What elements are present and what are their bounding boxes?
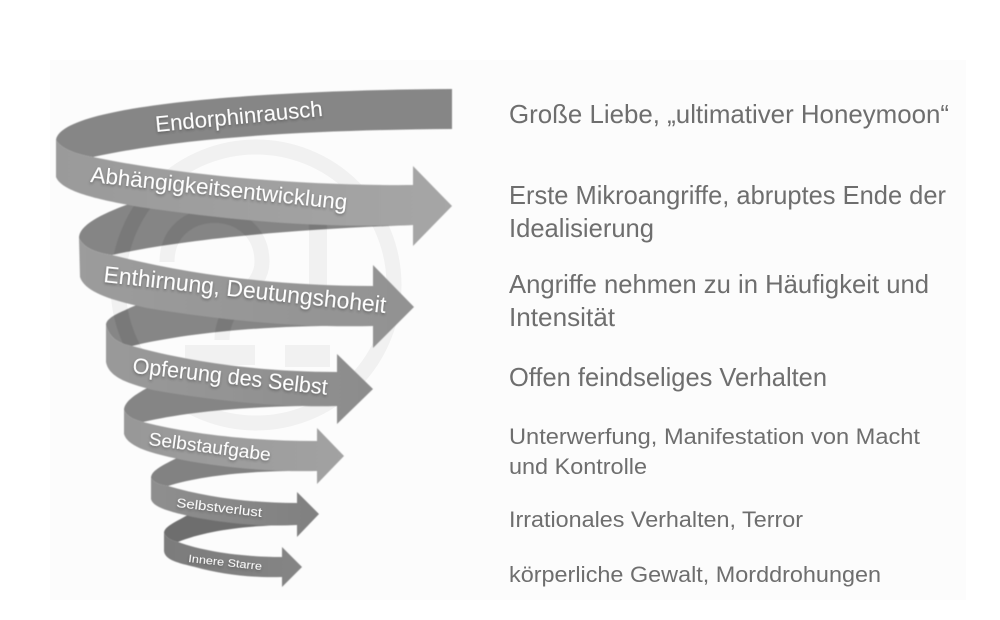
label: Opferung des Selbst: Opferung des Selbst (131, 353, 329, 400)
text: Erste Mikroangriffe: Erste Mikroangriffe, abruptes Ende der (509, 180, 946, 210)
arrow: coil 3 (106, 325, 373, 424)
watermark showing through back bands (114, 206, 326, 346)
text: körperliche Gewalt: körperliche Gewalt, Morddrohungen (509, 562, 881, 587)
arrow: coil 4 (124, 410, 344, 484)
text: Angriffe nehmen zu: Intensität (509, 302, 616, 332)
text: Angriffe nehmen zu: Angriffe nehmen zu in Häufigkeit und (509, 269, 929, 299)
watermark: circle with question and exclamation mark (118, 147, 394, 423)
label: Selbstaufgabe: Selbstaufgabe (147, 429, 272, 465)
text: Unterwerfung: und Kontrolle (509, 454, 647, 479)
panel: background (50, 60, 966, 600)
arrow: coil 1 (56, 140, 452, 246)
label: Selbstverlust: Selbstverlust (176, 495, 263, 520)
label: Enthirnung, Deutungshoheit: Enthirnung, Deutungshoheit (102, 261, 388, 318)
text: Große Liebe: Große Liebe, „ultimativer Honeymoon“ (509, 99, 949, 129)
band: back sections of the coils (56, 89, 452, 542)
label: Endorphinrausch: Endorphinrausch (154, 96, 324, 137)
label: Abhängigkeitsentwicklung: Abhängigkeitsentwicklung (89, 162, 349, 215)
text: Offen feindseliges Verhalten: Offen feindseliges Verhalten (509, 362, 827, 392)
text: Erste Mikroangriffe: Idealisierung (509, 213, 654, 243)
arrow: coil 5 (151, 478, 319, 537)
label: Innere Starre: Innere Starre (188, 553, 263, 573)
spiral funnel (56, 89, 452, 587)
text: Irrationales Verhalten: Irrationales Verhalten, Terror (509, 507, 803, 532)
arrow: coil 6 (164, 533, 302, 587)
arrow: coil 2 (79, 238, 414, 348)
text: Unterwerfung: Unterwerfung, Manifestation von Macht (509, 424, 920, 449)
